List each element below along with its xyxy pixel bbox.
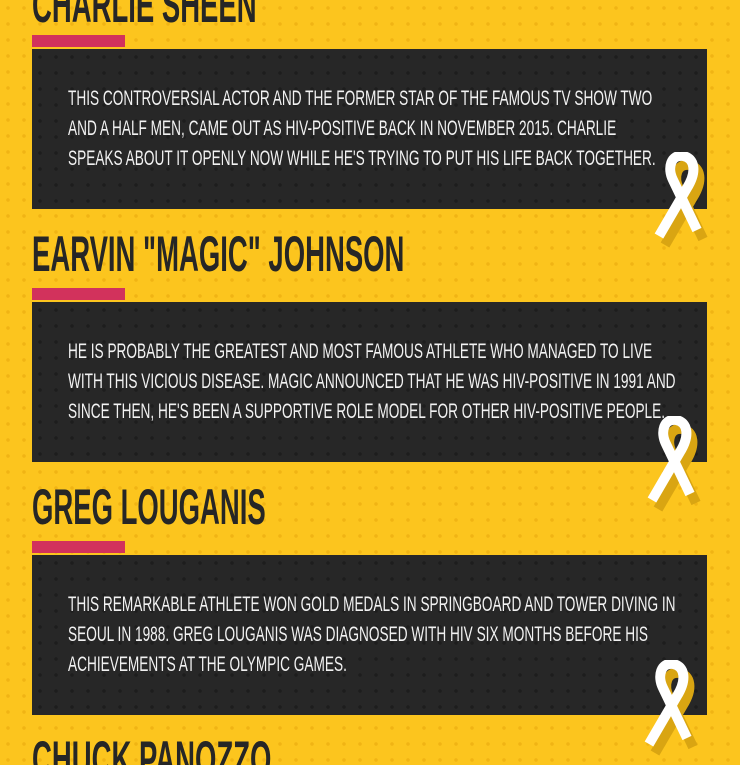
icon: ribbon <box>644 660 698 756</box>
panel: Greg Louganis <box>32 555 707 715</box>
panel: Greg Louganis: THIS REMARKABLE ATHLETE WON GOLD MEDALS IN SPRINGBOARD AND TOWER DIVING IN <box>68 593 676 616</box>
panel: Greg Louganis: ACHIEVEMENTS AT THE OLYMPIC GAMES. <box>68 653 347 676</box>
panel: Charlie Sheen: THIS CONTROVERSIAL ACTOR AND THE FORMER STAR OF THE FAMOUS TV SHOW TWO <box>68 87 652 110</box>
title: Greg Louganis: GREG LOUGANIS <box>32 479 266 535</box>
panel: Magic Johnson: HE IS PROBABLY THE GREATEST AND MOST FAMOUS ATHLETE WHO MANAGED TO LIVE <box>68 340 652 363</box>
panel: Charlie Sheen: AND A HALF MEN, CAME OUT AS HIV-POSITIVE BACK IN NOVEMBER 2015. CHARLIE <box>68 117 616 140</box>
icon: ribbon <box>648 416 700 512</box>
panel: Greg Louganis: SEOUL IN 1988. GREG LOUGANIS WAS DIAGNOSED WITH HIV SIX MONTHS BEFORE HIS <box>68 623 648 646</box>
icon: ribbon <box>654 152 708 248</box>
panel: Charlie Sheen <box>32 49 707 209</box>
panel: Charlie Sheen: SPEAKS ABOUT IT OPENLY NOW WHILE HE'S TRYING TO PUT HIS LIFE BACK TOGETHER. <box>68 147 656 170</box>
panel: Magic Johnson: WITH THIS VICIOUS DISEASE. MAGIC ANNOUNCED THAT HE WAS HIV-POSITIVE IN 1991 AND <box>68 370 676 393</box>
accent bar <box>32 541 125 553</box>
title: Magic Johnson: EARVIN "MAGIC" JOHNSON <box>32 226 404 282</box>
panel: Magic Johnson <box>32 302 707 462</box>
panel: Magic Johnson: SINCE THEN, HE'S BEEN A SUPPORTIVE ROLE MODEL FOR OTHER HIV-POSITIVE PEOPLE. <box>68 400 665 423</box>
accent bar <box>32 288 125 300</box>
accent bar <box>32 35 125 47</box>
